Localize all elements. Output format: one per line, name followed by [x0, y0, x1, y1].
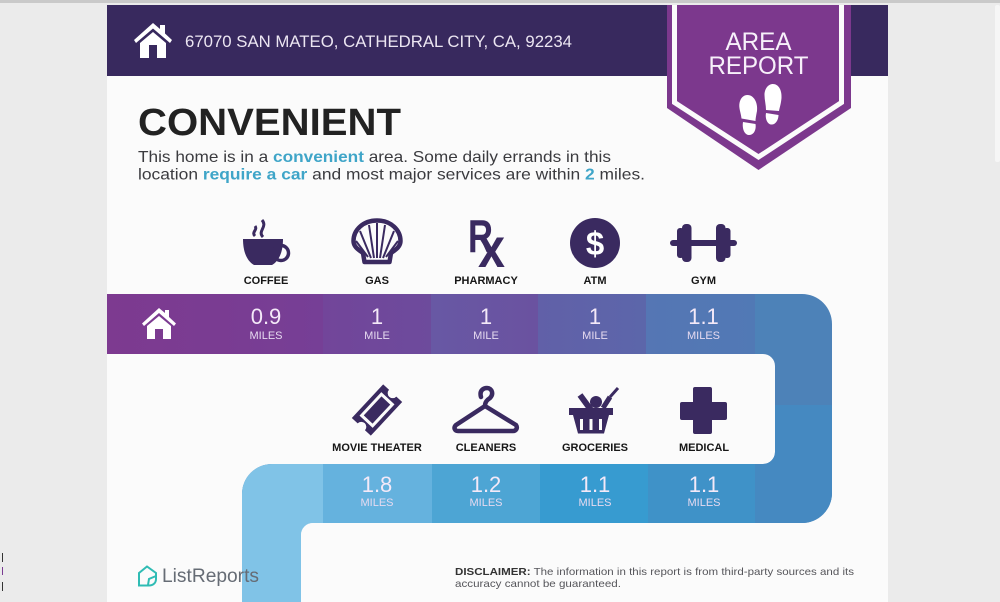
- distance: MILE: [473, 330, 499, 342]
- label: GAS: [365, 275, 389, 287]
- stop: coffee: [243, 220, 288, 342]
- distance: 1.1: [688, 304, 719, 329]
- distance: [364, 304, 390, 342]
- stop: atm: [570, 218, 620, 342]
- page panel: [107, 5, 888, 602]
- label: PHARMACY: [454, 275, 518, 287]
- distance: [578, 472, 612, 509]
- distance: 1: [371, 304, 383, 329]
- label: GROCERIES: [562, 442, 628, 454]
- distance: 0.9: [251, 304, 281, 329]
- disclaimer: accuracy cannot be guaranteed.: [455, 578, 621, 590]
- distance: MILES: [578, 497, 612, 509]
- icon: ticket: [352, 384, 402, 436]
- disclaimer: DISCLAIMER: The information in this report is from third-party sources and its: [455, 566, 854, 578]
- stop: movie theater: [332, 384, 422, 509]
- label: MOVIE THEATER: [332, 442, 422, 454]
- distance: MILES: [360, 497, 394, 509]
- icon: shell: [354, 220, 400, 262]
- icon: dumbbell: [670, 224, 737, 262]
- distance: MILE: [582, 330, 608, 342]
- icon: rx: x: [478, 216, 505, 279]
- distance: [582, 304, 608, 342]
- icon: home on route: [142, 308, 176, 339]
- stop: medical: [679, 387, 729, 509]
- distance: MILES: [687, 497, 721, 509]
- icon: dollar coin: $: [586, 225, 604, 262]
- distance: 1: [589, 304, 601, 329]
- stop: cleaners: [455, 388, 517, 509]
- distance: MILES: [249, 330, 283, 342]
- intro text: location require a car and most major services are within 2 miles.: [138, 166, 645, 184]
- title: CONVENIENT: [138, 102, 401, 144]
- stop: pharmacy: [454, 210, 518, 342]
- distance: 1.1: [580, 472, 610, 497]
- stop: gym: [670, 224, 737, 342]
- label: COFFEE: [244, 275, 288, 287]
- stop: gas: [354, 220, 400, 342]
- distance: 1.2: [471, 472, 501, 497]
- label: GYM: [691, 275, 716, 287]
- icon: rx: [468, 210, 505, 279]
- icon: footprints: [739, 84, 782, 135]
- intro text: This home is in a convenient area. Some daily errands in this: [138, 149, 611, 166]
- logo: listreports: ListReports: [162, 566, 259, 587]
- label: MEDICAL: [679, 442, 729, 454]
- icon: cross: [680, 387, 727, 434]
- stop: groceries: [562, 388, 628, 509]
- distance: 1: [480, 304, 492, 329]
- distance: [687, 472, 721, 509]
- label: CLEANERS: [456, 442, 516, 454]
- icon: house: [134, 23, 172, 58]
- distance: 1.1: [689, 472, 719, 497]
- address: 67070 SAN MATEO, CATHEDRAL CITY, CA, 92234: [185, 32, 572, 51]
- distance: [249, 304, 283, 342]
- badge: area report: AREA: [726, 28, 792, 56]
- icon: coffee cup: [243, 220, 288, 265]
- distance: [469, 472, 503, 509]
- distance: [473, 304, 499, 342]
- icon: hanger: [455, 388, 517, 431]
- distance: [360, 472, 394, 509]
- icon: basket: [569, 388, 618, 434]
- distance: MILES: [469, 497, 503, 509]
- distance: [687, 304, 720, 342]
- distance: MILES: [687, 330, 720, 342]
- badge: area report: REPORT: [708, 52, 808, 80]
- header bar: [107, 5, 888, 76]
- badge: area report: [667, 5, 851, 170]
- icon: rx: R: [468, 210, 493, 262]
- route ribbon: [107, 294, 888, 602]
- disclaimer: [455, 566, 854, 590]
- label: ATM: [583, 275, 607, 287]
- distance: MILE: [364, 330, 390, 342]
- intro text: [138, 149, 645, 184]
- distance: 1.8: [362, 472, 392, 497]
